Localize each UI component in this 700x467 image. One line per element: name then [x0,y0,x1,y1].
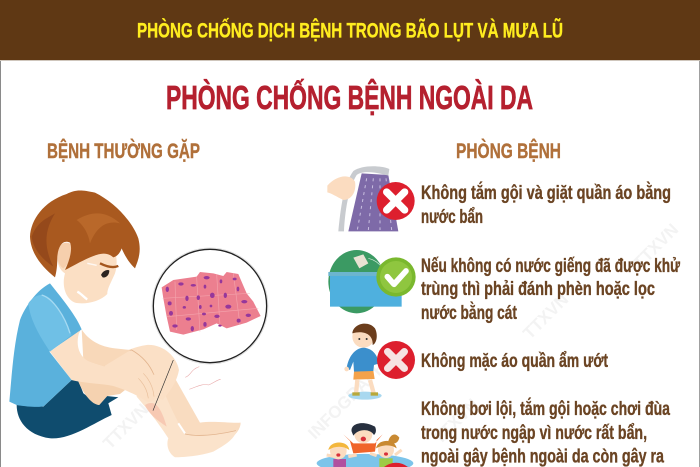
red X badge [377,182,415,220]
text: no damp clothes: Không mặc áo quần ẩm ướt [421,351,608,372]
watermarks [99,220,682,453]
near leg and foot [137,383,237,457]
watermarks: TTXVN [214,290,267,343]
magnifier line [153,360,173,411]
text: disinfected water [421,256,680,324]
icon: children swimming with red X [317,423,413,467]
watermarks: INFOGRAPHICS [304,337,410,443]
hand [327,176,355,200]
far arm [82,329,131,367]
shirt [9,283,82,407]
text: no wading in flood water [421,398,670,467]
text: no dirty water [421,182,671,228]
watermarks: TTXVN [519,290,572,343]
header banner [0,0,700,61]
green check badge [376,257,416,297]
text: no dirty water: nước bẩn [421,207,483,228]
main heading: PHÒNG CHỐNG BỆNH NGOÀI DA [166,78,533,116]
knee [103,345,179,400]
icon: shower with red X [327,166,415,231]
face [57,240,117,303]
shower spray [348,173,398,231]
icon: child in wet clothes with red X [344,324,415,400]
skin cells [162,272,261,335]
watermarks: TTXVN [629,220,682,273]
icon: water tank with green check [328,250,416,313]
watermarks: TTXVN [99,400,152,453]
hair [30,191,140,277]
right subheading: PHÒNG BỆNH [456,139,561,163]
eye and brow [101,270,109,278]
far leg and foot [157,357,241,445]
illustration: boy with skin disease [9,191,268,457]
watermarks: TTXVN [429,395,482,448]
back of thigh [78,370,133,405]
itch marks [185,367,221,389]
magnifier circle [152,248,268,364]
left subheading: BỆNH THƯỜNG GẶP [47,139,200,163]
shorts [17,380,118,438]
red X badge [377,341,415,379]
near arm and hand [50,330,159,402]
text: disinfected water: nước bằng cát [421,302,517,324]
shower head [338,166,389,231]
red X badge [384,463,408,467]
